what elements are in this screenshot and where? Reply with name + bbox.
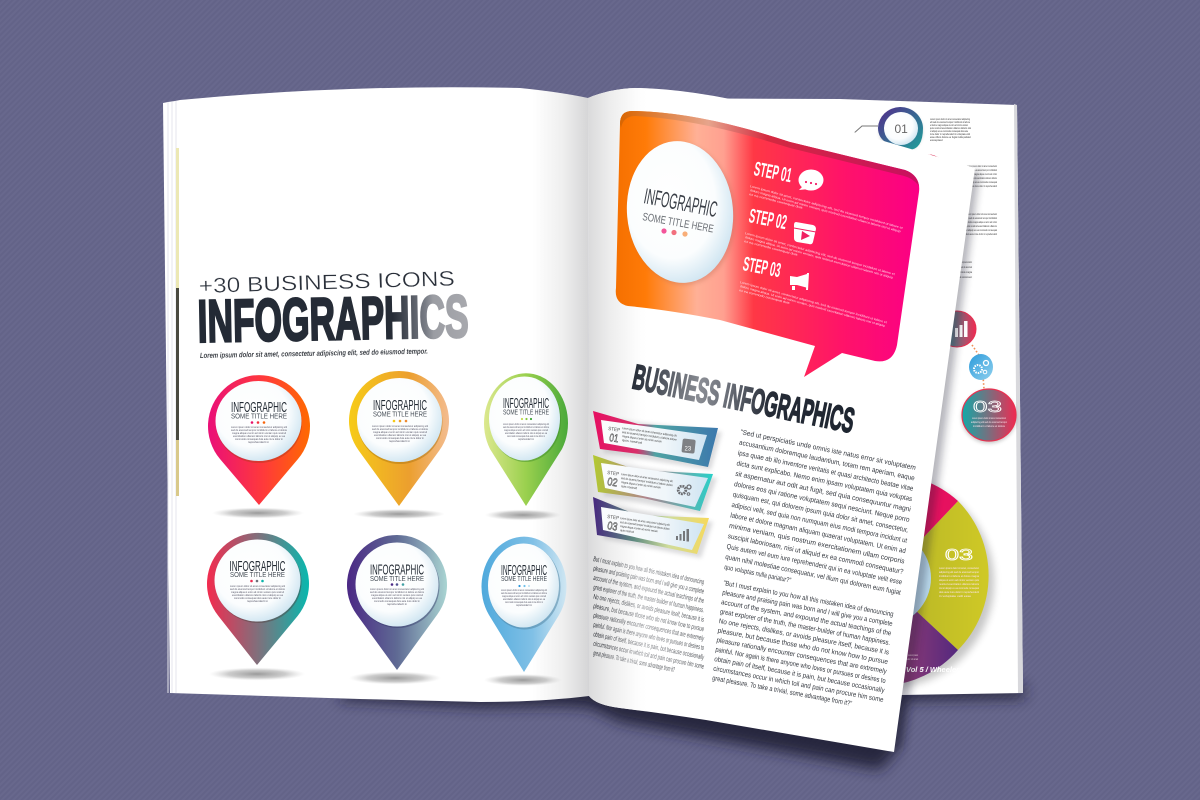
back page text blocks: Lorem ipsum dolor sit amet consectetur (967, 164, 997, 168)
pin 5 purple: commodo consequat duis aute irure dolor in (374, 599, 421, 603)
pin 1 red orange: sed do eiusmod tempor incididunt ut labore et dolore (231, 428, 288, 432)
pie chart with segments: dolor sit amet (906, 657, 918, 661)
right column paragraph one: labore et dolore magnam aliquam quaerat voluptatem. Ut enim ad (730, 512, 906, 555)
step card 3: STEP (607, 514, 620, 522)
pin 5 purple: reprehenderit in (387, 602, 408, 606)
back page text blocks: esse cillum dolore eu fugiat nulla pariatur (930, 135, 971, 139)
right column paragraph two: painful. Nor again is there anyone who loves or pursues or desires to (715, 647, 886, 685)
pin 1 red orange: SOME TITLE HERE (231, 412, 287, 420)
number circle 03: 03 (973, 399, 1002, 416)
back page text blocks: Lorem ipsum dolor (958, 260, 972, 264)
step card 3: quis nostrud (620, 528, 635, 534)
step card 1: Lorem ipsum dolor sit amet consectetur adipiscing elit (622, 426, 677, 438)
pie chart with segments: Lorem ipsum (908, 653, 918, 657)
back page text blocks: et dolore magna (958, 270, 972, 274)
right column paragraph one: Quis autem vel eum iure reprehenderit qui in ea voluptate velit esse (726, 544, 903, 586)
pin 6 blue: sed do eiusmod tempor incididunt ut labore et dolore (501, 591, 547, 595)
icon: video player (794, 222, 816, 244)
step 02: Lorem ipsum dolor sit amet, consectetur adipiscing elit, sed do eiusmod tempor incididunt ut labore et (745, 231, 895, 276)
right column paragraph one: accusantium doloremque laudantium, totam rem aperiam, eaque (738, 440, 915, 482)
step card 1: sed do eiusmod tempor incididunt ut labore dolore (622, 430, 677, 442)
right column paragraph two: pleasure, but because those who do not know how to pursue (717, 628, 888, 666)
left column paragraph: obtain pain of itself, because it is pain, but because occasionally (593, 631, 705, 662)
back page text blocks: et dolore magna aliqua ut enim ad minim (967, 172, 997, 176)
pin 4 red teal (207, 533, 309, 680)
pin 4 red teal: reprehenderit in (247, 599, 269, 603)
step card 1: 01 (609, 432, 619, 445)
right column paragraph two: account of the system, and expound the actual teachings of the (720, 599, 892, 638)
right column paragraph two: pleasure and praising pain was born and I will give you a complete (722, 590, 893, 628)
icon: chat bubble (798, 170, 824, 190)
right column paragraph two: pleasure rationally encounter consequences that are extremely (716, 637, 888, 676)
right column paragraph one (724, 429, 917, 597)
step card 2: sed do eiusmod tempor incididunt ut labore dolore (621, 476, 673, 487)
bubble circle title: INFOGRAPHIC (642, 183, 720, 222)
back page text blocks: ut aliquip ex ea commodo consequat duis aute (930, 129, 968, 133)
step card 2: Lorem ipsum dolor sit amet consectetur adipiscing elit (621, 472, 673, 483)
pin 2 yellow: INFOGRAPHIC (373, 397, 427, 414)
pin 1 red orange: INFOGRAPHIC (231, 399, 287, 416)
back page text blocks: quis nostrud exerc (958, 275, 972, 279)
step card 2: magna aliqua ut enim ad minim veniam (621, 480, 661, 490)
pin 1 red orange: Lorem ipsum dolor sit amet consectetur adipiscing elit (231, 425, 287, 429)
right column paragraph one: dicta sunt explicabo. Nemo enim ipsam voluptatem quia voluptas (736, 460, 913, 503)
pin 2 yellow: commodo consequat duis aute irure dolor in (376, 436, 425, 440)
right column paragraph one: quo voluptas nulla pariatur?" (724, 564, 792, 585)
right column paragraph one: ipsa quae ab illo inventore veritatis et quasi architecto beatae vitae (737, 450, 914, 493)
step 03 (739, 253, 888, 328)
left page (163, 87, 589, 702)
right column paragraph one: "Sed ut perspiciatis unde omnis iste natus error sit voluptatem (740, 429, 917, 472)
step card 3 (593, 497, 713, 558)
pin 5 purple: SOME TITLE HERE (370, 574, 424, 583)
magazine back right page (588, 98, 1023, 696)
step card 2: 02 (607, 476, 618, 489)
pie chart with segments (782, 474, 994, 688)
step card 3: 03 (607, 520, 618, 533)
back page text blocks: ut aliquip ex ea commodo consequat (967, 180, 997, 184)
pin 4 red teal: SOME TITLE HERE (230, 570, 285, 579)
pin 6 blue: Lorem ipsum dolor sit amet consectetur adipiscing elit (501, 588, 547, 592)
back page text blocks: et dolore magna aliqua ut enim ad minim (966, 220, 997, 224)
eyebrow heading: +30 BUSINESS ICONS (198, 267, 455, 298)
pin 5 purple (347, 535, 447, 684)
back page text blocks: elit sed do eiusmod tempor incididunt ut labore (930, 120, 970, 124)
pin 1 red orange: exercitation ullamco laboris nisi ut aliquip ex ea (233, 434, 286, 438)
pin 3 green: reprehenderit in (518, 437, 534, 441)
step card 2: STEP (607, 470, 620, 478)
pie chart with segments: nostrud exercitation ullamco laboris (939, 582, 979, 586)
icon: calendar: 23 (684, 446, 692, 452)
pin 2 yellow: reprehenderit in (389, 439, 411, 443)
step 03: ex ea commodo consequat duis (739, 288, 791, 305)
business infographics heading: BUSINESS INFOGRAPHICS (629, 358, 858, 441)
pin 3 green (484, 373, 568, 520)
left column paragraph: account of the system, and expound the actual teachings of the (593, 575, 705, 605)
step 01: dolore magna aliqua. Ut enim ad minim veniam, quis nostrud exercitation ullamco laboris nisi ut aliquip (750, 188, 902, 233)
pin 3 green: commodo consequat duis aute irure dolor in (507, 434, 545, 438)
step 01: Lorem ipsum dolor sit amet, consectetur adipiscing elit, sed do eiusmod tempor incididunt ut labore et (750, 184, 903, 230)
icon: gears (678, 485, 691, 495)
left column paragraph (593, 556, 705, 674)
right column paragraph one: dolores eos qui ratione voluptatem sequi nesciunt. Neque porro (733, 481, 910, 524)
back page text blocks: duis aute irure dolor in reprehenderit (966, 232, 997, 236)
right column paragraph one: suscipit laboriosam, nisi ut aliquid ex ea commodi consequatur? (727, 533, 904, 576)
main title: INFOGRAPHICS (197, 283, 469, 355)
back page text blocks: quis nostrud exercitation ullamco laboris nisi (930, 126, 971, 130)
step card 2: quis nostrud (621, 484, 638, 490)
step card 2 (593, 455, 717, 515)
step card 3: sed do eiusmod tempor incididunt ut labore dolore (620, 520, 670, 531)
back page text blocks: quis nostrud exercitation ullamco (966, 224, 997, 228)
pie chart with segments: adipiscing elit sed do eiusmod tempor (939, 570, 979, 574)
pin 5 purple: sed do eiusmod tempor incididunt ut labore et dolore (370, 590, 424, 594)
step 01: STEP 01 (752, 158, 794, 187)
right column paragraph two: circumstances occur in which toil and pain can procure him some (713, 666, 884, 704)
footer volume text: Vol 5 / Wheeler (906, 665, 960, 674)
pie chart with segments: aliqua ut enim ad minim veniam quis (939, 578, 979, 582)
left column paragraph: painful. Nor again is there anyone who loves or pursues or desires to (593, 622, 705, 652)
number circle 03 (962, 389, 1016, 443)
right column paragraph one: quisquam est, qui dolorem ipsum quia dolor sit amet, consectetur, (732, 492, 909, 534)
pin 6 blue: magna aliqua ut enim ad minim veniam quis nostrud (502, 594, 546, 598)
step 01: ex ea commodo consequat duis (749, 192, 804, 210)
pin 4 red teal: INFOGRAPHIC (230, 558, 286, 575)
pin 2 yellow: Lorem ipsum dolor sit amet consectetur adipiscing elit (372, 424, 428, 428)
pin 3 green: SOME TITLE HERE (503, 408, 549, 416)
step 02: STEP 02 (747, 205, 789, 234)
right column paragraph one: adipisci velit, sed quia non numquam eius modi tempora incidunt ut (731, 502, 908, 545)
back page text blocks: Lorem ipsum dolor sit amet consectetur (966, 212, 997, 216)
back page text blocks: excepteur (930, 138, 943, 142)
left column paragraph: circumstances occur in which toil and pain can procure him some (593, 641, 705, 671)
step card 3: magna aliqua ut enim ad minim veniam (620, 524, 658, 533)
icon: bar chart (676, 529, 689, 542)
pie chart with segments: incididunt ut labore et dolore magna (939, 574, 979, 578)
back page text blocks: ut aliquip ex ea commodo consequat (966, 228, 997, 232)
pie chart with segments: 03 (945, 547, 973, 564)
pin 1 red orange: commodo consequat duis aute irure dolor in (235, 437, 284, 441)
step 02: ex ea commodo consequat duis (744, 239, 799, 257)
speech bubble banner (616, 111, 919, 377)
pie chart with segments: Lorem ipsum dolor sit amet, consectetur (939, 566, 979, 570)
chart icon circle (938, 311, 984, 389)
pin 5 purple: exercitation ullamco laboris nisi ut aliquip ex ea (372, 596, 423, 600)
photo strip (176, 148, 179, 496)
left column paragraph: pleasure, but because those who do not know how to pursue (593, 603, 705, 633)
back page text blocks: elit sed do eiusmod (958, 265, 972, 269)
pie chart with segments: in voluptate velit esse (939, 594, 971, 598)
right column paragraph two (712, 580, 894, 708)
pin 6 blue: commodo consequat duis aute irure dolor in (505, 600, 543, 604)
magazine drop shadow (340, 680, 1024, 770)
number circle 01: 01 (894, 122, 908, 136)
pin 4 red teal: sed do eiusmod tempor incididunt ut labore et dolore (230, 587, 285, 591)
pin 5 purple: Lorem ipsum dolor sit amet consectetur adipiscing elit (370, 587, 424, 591)
front turning page (588, 88, 975, 752)
pin 1 red orange: magna aliqua ut enim ad minim veniam quis nostrud (232, 431, 286, 435)
left column paragraph: great explorer of the truth, the master-builder of human happiness. (593, 584, 705, 614)
right column paragraph two: "But I must explain to you how all this mistaken idea of denouncing (723, 580, 894, 619)
pin 2 yellow (349, 371, 449, 519)
pin 2 yellow: exercitation ullamco laboris nisi ut aliquip ex ea (374, 433, 427, 437)
right column paragraph two: great explorer of the truth, the master-builder of human happiness. (719, 609, 891, 647)
number circle 03: Lorem ipsum dolor sit amet consectetur (972, 416, 1006, 420)
pin 2 yellow: SOME TITLE HERE (373, 410, 427, 418)
back page text blocks: et dolore magna aliqua ut enim ad minim veniam (930, 123, 968, 127)
right column paragraph two: obtain pain of itself, because it is pain, but because occasionally (714, 656, 885, 695)
pin 3 green: magna aliqua ut enim ad minim veniam quis nostrud (504, 428, 548, 432)
left column paragraph: pleasure and praising pain was born and I will give you a complete (593, 566, 705, 596)
step 02: dolore magna aliqua. Ut enim ad minim veniam, quis nostrud exercitation ullamco laboris nisi ut aliquip (745, 235, 894, 280)
step 02 (744, 205, 895, 280)
right column paragraph one: sit aspernatur aut odit aut fugit, sed quia consequuntur magni (735, 471, 912, 514)
right column paragraph one: quam nihil molestiae consequatur, vel illum qui dolorem eum fugiat (725, 554, 901, 597)
pin 5 purple: INFOGRAPHIC (370, 562, 424, 578)
back page text blocks: duis aute irure dolor in reprehenderit (967, 184, 997, 188)
pin 6 blue: INFOGRAPHIC (501, 562, 547, 579)
back page text blocks: elit sed do eiusmod tempor incididunt (966, 216, 997, 220)
step card 3: Lorem ipsum dolor sit amet consectetur adipiscing elit (620, 516, 670, 527)
step 03: STEP 03 (741, 253, 783, 282)
left column paragraph: pleasure rationally encounter consequences that are extremely (593, 613, 705, 643)
bubble circle title (621, 137, 741, 289)
pin 3 green: exercitation ullamco laboris nisi ut aliquip ex ea (505, 431, 547, 435)
pin 3 green: sed do eiusmod tempor incididunt ut labore et dolore (503, 425, 549, 429)
front page shadow (890, 170, 980, 750)
pin 3 green: INFOGRAPHIC (503, 395, 549, 412)
gear icon circle (969, 354, 993, 380)
pie chart with segments: nisi ut aliquip ex ea commodo consequat (939, 586, 979, 590)
pin 1 red orange (208, 375, 310, 518)
pin 4 red teal: Lorem ipsum dolor sit amet consectetur adipiscing elit (230, 584, 285, 588)
pin 4 red teal: commodo consequat duis aute irure dolor in (234, 596, 282, 600)
number circle 03: adipiscing elit sed do eiusmod tempor (971, 420, 1007, 424)
pie chart with segments: duis aute irure dolor in reprehenderit (939, 590, 979, 594)
pin 6 blue (482, 537, 567, 686)
icon: megaphone (790, 273, 809, 290)
back page text blocks (930, 117, 997, 279)
red arc behind page (918, 154, 942, 166)
step 03: dolore magna aliqua. Ut enim ad minim veniam, quis nostrud exercitation ullamco laboris nisi ut aliquip (740, 284, 886, 328)
step 03: Lorem ipsum dolor sit amet, consectetur adipiscing elit, sed do eiusmod tempor incididunt ut labore et (740, 280, 888, 324)
step 01 (749, 158, 903, 233)
right column paragraph two: No one rejects, dislikes, or avoids pleasure itself, because it is (718, 618, 890, 657)
pin 2 yellow: magna aliqua ut enim ad minim veniam quis nostrud (373, 430, 427, 434)
number circle 01 (853, 107, 923, 152)
pin 4 red teal: exercitation ullamco laboris nisi ut aliquip ex ea (232, 593, 284, 597)
pin 5 purple: magna aliqua ut enim ad minim veniam quis nostrud (371, 593, 423, 597)
number circle 03: incididunt ut labore et dolore (973, 424, 1005, 428)
back page text blocks: elit sed do eiusmod tempor incididunt (967, 168, 997, 172)
right column paragraph two: great pleasure. To take a trivial, some advantage from it?" (712, 675, 853, 708)
left column paragraph: great pleasure. To take a trivial, some advantage from it? (593, 650, 675, 674)
back page text blocks: Lorem ipsum dolor sit amet consectetur adipiscing (930, 117, 970, 121)
left column paragraph: But I must explain to you how all this mistaken idea of denouncing (593, 556, 705, 586)
step card 1: STEP (608, 426, 621, 434)
pin 2 yellow: sed do eiusmod tempor incididunt ut labore et dolore (372, 427, 429, 431)
subtitle: Lorem ipsum dolor sit amet, consectetur adipiscing elit, sed do eiusmod tempor. (200, 347, 428, 360)
step card 1: magna aliqua ut enim ad minim veniam (622, 434, 662, 444)
pin 3 green: Lorem ipsum dolor sit amet consectetur adipiscing elit (503, 422, 549, 426)
pin 6 blue: SOME TITLE HERE (501, 574, 547, 583)
pin 6 blue: exercitation ullamco laboris nisi ut aliquip ex ea (503, 597, 545, 601)
pin 1 red orange: reprehenderit in (248, 440, 270, 444)
step card 1 (593, 411, 722, 470)
back page text blocks: irure dolor in reprehenderit in voluptate velit (930, 132, 970, 136)
right column paragraph one: minima veniam, quis nostrum exercitationem ullam corporis (728, 523, 906, 566)
pin 6 blue: reprehenderit in (516, 603, 532, 607)
pin 4 red teal: magna aliqua ut enim ad minim veniam quis nostrud (231, 590, 284, 594)
step card 1: quis nostrud (622, 438, 643, 445)
back page text blocks: quis nostrud exercitation ullamco laboris (967, 176, 997, 180)
bubble circle title: SOME TITLE HERE (641, 211, 714, 235)
left column paragraph: No one rejects, dislikes, or avoids pleasure itself, because it is (593, 594, 705, 624)
